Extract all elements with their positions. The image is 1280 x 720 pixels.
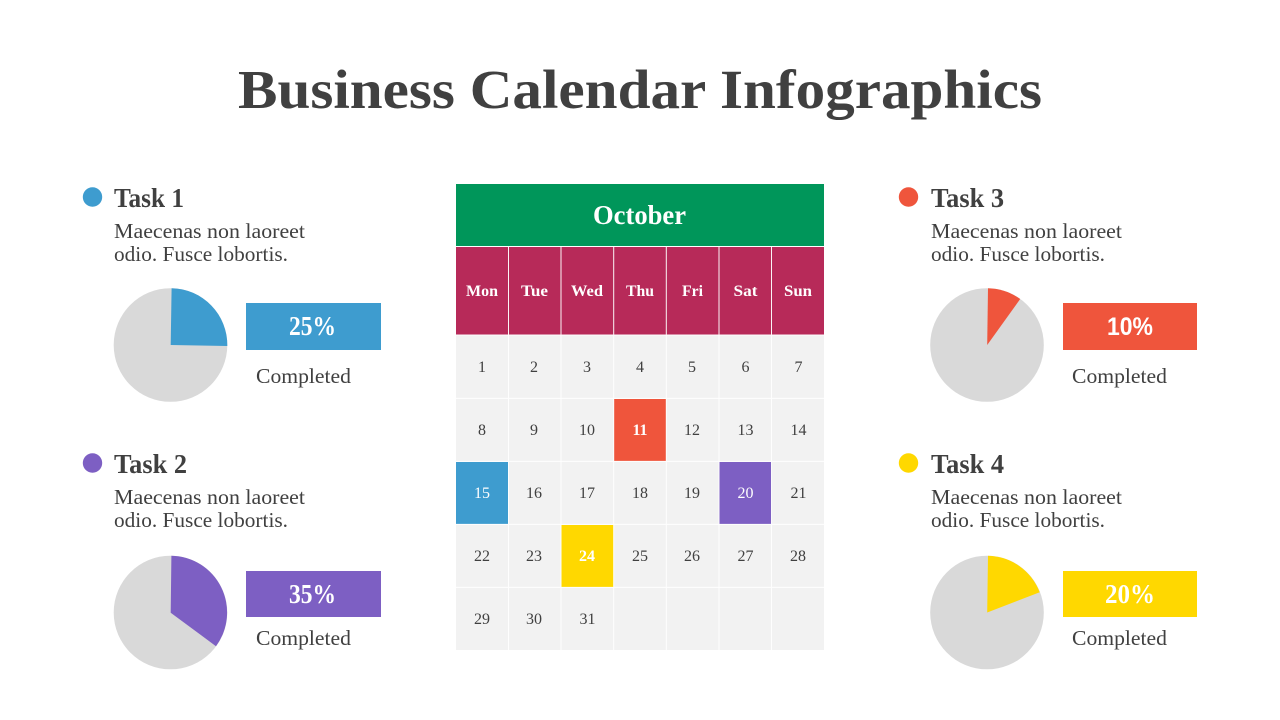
completed label: Completed <box>1072 364 1167 388</box>
task 2 description: odio. Fusce lobortis. <box>114 508 288 532</box>
task 2 description: Maecenas non laoreet <box>114 485 305 509</box>
date numbers: 9 <box>530 422 538 439</box>
date numbers: 30 <box>526 611 542 628</box>
panel: task 4 <box>899 449 1197 669</box>
date numbers: 27 <box>738 548 754 565</box>
month header: October <box>593 200 686 230</box>
task 1 description <box>114 219 305 266</box>
icon: task 2 dot <box>83 453 102 473</box>
task 4 heading: Task 4 <box>931 449 1004 479</box>
panel: task 2 <box>83 449 381 669</box>
date numbers: 26 <box>684 548 700 565</box>
icon: task 4 dot <box>899 453 918 473</box>
panel: task 3 <box>899 183 1197 402</box>
date numbers: 10 <box>579 422 595 439</box>
weekday header row: Thu <box>626 283 654 300</box>
date numbers: 3 <box>583 359 591 376</box>
weekday header row: Sun <box>784 283 812 300</box>
date numbers: 20 <box>738 485 754 502</box>
date numbers: 18 <box>632 485 648 502</box>
weekday header row <box>456 247 824 335</box>
badge: 35%: 35% <box>289 579 336 609</box>
task 3 description <box>931 219 1122 266</box>
date numbers: 4 <box>636 359 644 376</box>
weekday header row: Fri <box>682 283 704 300</box>
date numbers: 8 <box>478 422 486 439</box>
date numbers: 2 <box>530 359 538 376</box>
task 1 description: odio. Fusce lobortis. <box>114 242 288 266</box>
badge: 10%: 10% <box>1107 313 1153 341</box>
date numbers: 6 <box>742 359 750 376</box>
date numbers: 11 <box>632 422 648 439</box>
completed label: Completed <box>256 626 351 650</box>
pie chart: task 3 10% <box>930 288 1044 402</box>
task 2 description <box>114 485 305 532</box>
badge: 20%: 20% <box>1105 579 1155 609</box>
date numbers: 14 <box>790 422 806 439</box>
date numbers: 17 <box>579 485 595 502</box>
task 4 description: Maecenas non laoreet <box>931 485 1122 509</box>
task 1 description: Maecenas non laoreet <box>114 219 305 243</box>
date numbers: 5 <box>688 359 696 376</box>
weekday header row: Mon <box>466 283 498 300</box>
badge: 10% <box>1063 303 1197 350</box>
badge: 35% <box>246 571 381 617</box>
task 3 description: Maecenas non laoreet <box>931 219 1122 243</box>
pie chart: task 1 25% <box>114 288 227 402</box>
task 3 heading: Task 3 <box>931 183 1004 213</box>
pie chart: task 2 35% <box>114 556 227 669</box>
pie chart: task 4 20% <box>930 556 1044 669</box>
date numbers: 21 <box>790 485 806 502</box>
date numbers: 15 <box>474 485 490 502</box>
badge: 25% <box>246 303 381 350</box>
date numbers <box>474 359 806 628</box>
date numbers: 19 <box>684 485 700 502</box>
panel: task 1 <box>83 183 381 402</box>
month header <box>456 184 824 246</box>
task 4 description: odio. Fusce lobortis. <box>931 508 1105 532</box>
completed label: Completed <box>256 364 351 388</box>
icon: task 1 dot <box>83 187 102 207</box>
date numbers: 12 <box>684 422 700 439</box>
date numbers: 25 <box>632 548 648 565</box>
date numbers: 28 <box>790 548 806 565</box>
icon: task 3 dot <box>899 187 918 207</box>
date numbers: 13 <box>738 422 754 439</box>
task 2 heading: Task 2 <box>114 449 187 479</box>
date numbers: 7 <box>794 359 802 376</box>
date numbers: 22 <box>474 548 490 565</box>
weekday header row: Tue <box>521 283 548 300</box>
task 1 heading: Task 1 <box>114 183 184 213</box>
date numbers: 29 <box>474 611 490 628</box>
task 3 description: odio. Fusce lobortis. <box>931 242 1105 266</box>
date numbers: 16 <box>526 485 542 502</box>
badge: 20% <box>1063 571 1197 617</box>
date numbers: 23 <box>526 548 542 565</box>
completed label: Completed <box>1072 626 1167 650</box>
weekday header row: Wed <box>571 283 603 300</box>
task 4 description <box>931 485 1122 532</box>
title: Business Calendar Infographics <box>238 59 1042 120</box>
date numbers: 31 <box>580 611 596 628</box>
calendar grid background <box>456 335 824 650</box>
highlighted dates <box>456 399 772 587</box>
date numbers: 24 <box>579 548 595 565</box>
weekday header row: Sat <box>734 283 758 300</box>
date numbers: 1 <box>478 359 486 376</box>
badge: 25%: 25% <box>289 311 336 341</box>
panel: calendar <box>456 184 824 650</box>
